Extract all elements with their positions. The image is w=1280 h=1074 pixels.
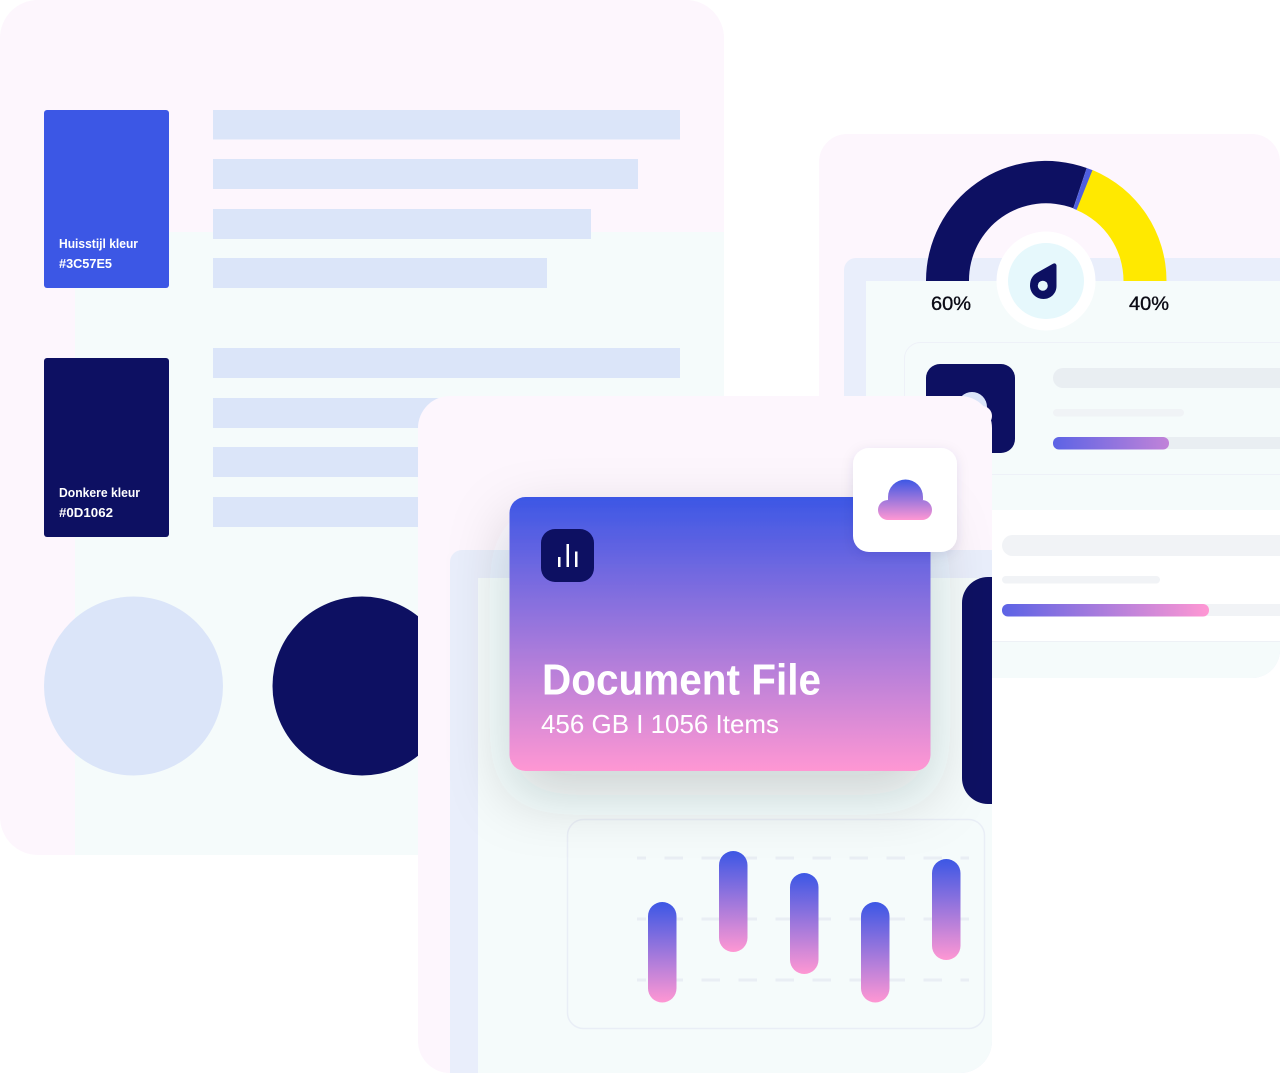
panel: brand colour style guide <box>0 0 724 855</box>
gauge chart <box>926 161 1169 330</box>
card title: Document File <box>542 656 821 704</box>
gauge segment: 60% navy <box>926 161 1087 281</box>
icon: drop <box>1030 263 1056 299</box>
icon: bar chart tile <box>541 529 594 582</box>
circle: dark colour sample <box>272 596 452 776</box>
text placeholder lines: dark colour <box>213 348 680 527</box>
panel: dashboard with gauge <box>819 134 1280 698</box>
gauge hub <box>996 232 1096 330</box>
card subtitle: 456 GB I 1056 Items <box>541 709 779 739</box>
swatch: brand colour: #3C57E5 <box>59 256 112 271</box>
navy side bar <box>962 577 992 804</box>
cloud tile <box>853 448 957 552</box>
circle: light colour sample <box>44 596 223 776</box>
swatch: brand colour <box>44 110 169 288</box>
icon: cloud <box>878 480 932 520</box>
swatch: dark colour: #0D1062 <box>59 505 113 520</box>
label: 40%: 40% <box>1129 293 1169 315</box>
label: 60%: 60% <box>931 293 971 315</box>
list row: second item <box>960 510 1280 642</box>
panel: document storage <box>418 396 1050 1074</box>
swatch: dark colour: Donkere kleur <box>59 485 140 500</box>
swatch: dark colour <box>44 358 169 537</box>
card: document file <box>510 497 930 771</box>
swatch: brand colour: Huisstijl kleur <box>59 236 138 251</box>
gauge divider <box>1073 168 1093 210</box>
gauge segment: 40% yellow <box>1076 170 1167 281</box>
icon tile: avatar <box>926 364 1015 453</box>
text placeholder lines: brand colour <box>213 110 680 288</box>
list row: first item <box>904 342 1280 474</box>
bar chart <box>568 820 984 1028</box>
